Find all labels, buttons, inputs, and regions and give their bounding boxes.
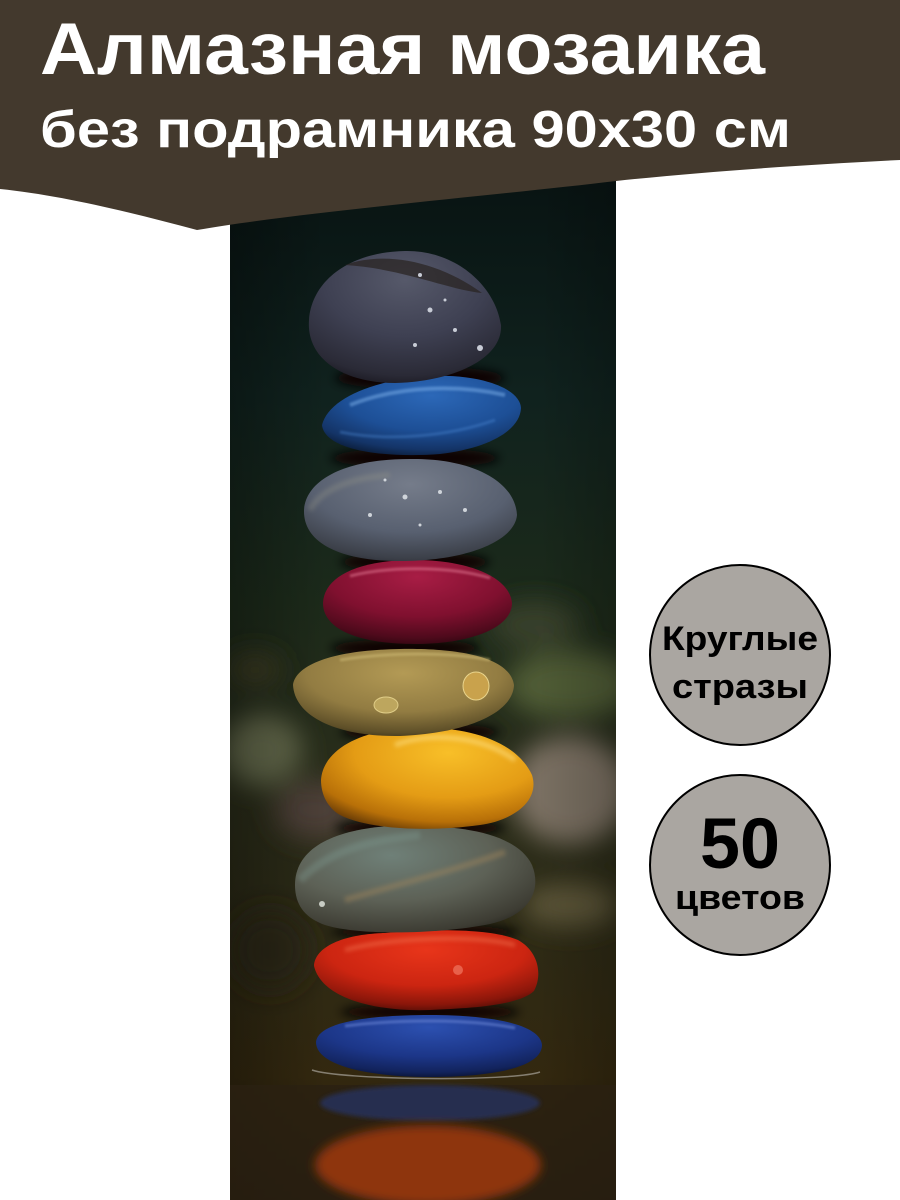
reflection: red stone bbox=[315, 1125, 541, 1200]
water ripple bbox=[312, 1070, 540, 1079]
droplets bbox=[368, 478, 467, 526]
badge: 50 colours: 50 bbox=[700, 805, 780, 884]
badge: round rhinestones: Круглые bbox=[662, 620, 818, 658]
badge: round rhinestones bbox=[650, 565, 830, 745]
water surface bbox=[230, 1116, 616, 1200]
stone 8: red bbox=[314, 930, 538, 1010]
title bbox=[40, 9, 791, 159]
badge: 50 colours: цветов bbox=[675, 879, 805, 917]
stone 5: ochre bbox=[293, 649, 514, 736]
title: Алмазная мозаика bbox=[40, 9, 767, 90]
badge: 50 colours bbox=[650, 775, 830, 955]
stone 4: crimson bbox=[323, 560, 512, 644]
photo: stacked colourful stones bbox=[222, 170, 636, 1200]
subtitle: без подрамника 90х30 см bbox=[40, 101, 791, 159]
header banner bbox=[0, 0, 900, 230]
stone shadows bbox=[330, 366, 520, 1020]
stone 7: grey-green bbox=[295, 826, 535, 932]
blurred background stones bbox=[230, 594, 616, 938]
water droplets bbox=[463, 672, 489, 700]
stone 3: grey bbox=[304, 459, 517, 561]
badge: round rhinestones: стразы bbox=[672, 668, 808, 706]
stone 6: yellow bbox=[321, 728, 533, 829]
stone 2: blue bbox=[322, 376, 521, 455]
reflection: blue stone bbox=[320, 1085, 540, 1121]
stone 9: navy bbox=[316, 1015, 542, 1077]
stone 1: dark slate bbox=[309, 251, 501, 383]
